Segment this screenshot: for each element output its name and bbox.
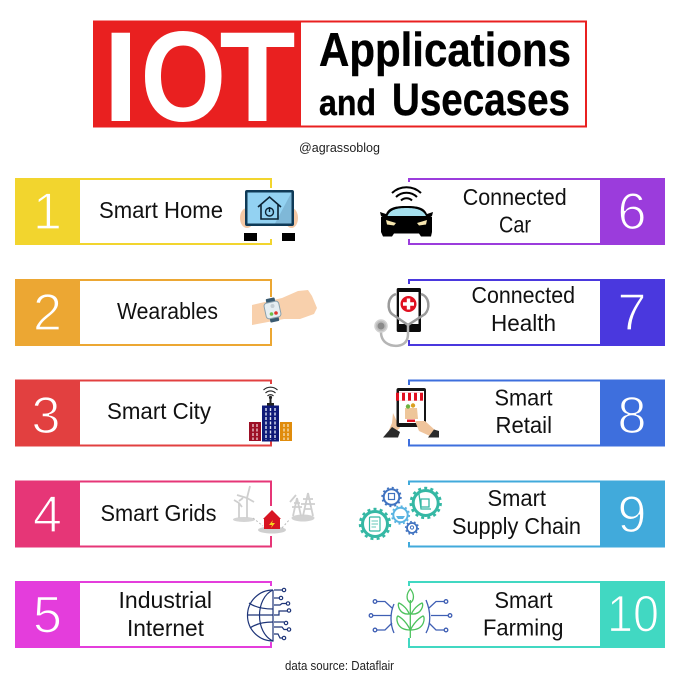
panel: 8 Smart Retail: Smart <box>494 385 553 411</box>
title: Applications <box>319 23 571 76</box>
panel: 7 Connected Health <box>375 279 665 346</box>
icon: connected car <box>380 182 433 239</box>
title: Usecases <box>392 74 570 125</box>
panel: 7 Connected Health: 7 <box>618 284 646 342</box>
panel: 2 Wearables: Wearables <box>117 298 218 324</box>
panel: 5 Industrial Internet: Industrial <box>118 587 212 613</box>
icon: smartwatch on wrist <box>252 290 317 328</box>
icon: health phone with stethoscope <box>375 284 428 346</box>
panel: 1 Smart Home: Smart Home <box>99 197 223 223</box>
panel: 3 Smart City: 3 <box>32 387 60 445</box>
icon: plant with circuits <box>369 586 452 638</box>
author handle: @agrassoblog <box>299 141 380 155</box>
panel: 7 Connected Health: Health <box>491 310 556 336</box>
panel: 7 Connected Health: Connected <box>472 282 575 308</box>
panel: 10 Smart Farming: Farming <box>483 615 564 641</box>
panel: 10 Smart Farming: 10 <box>607 586 659 644</box>
panel: 2 Wearables <box>15 279 317 346</box>
panel: 9 Smart Supply Chain: Supply Chain <box>452 513 581 539</box>
panel: 1 Smart Home: 1 <box>33 183 62 241</box>
icon: circuit globe <box>248 586 292 642</box>
panel: 5 Industrial Internet <box>15 581 292 648</box>
panel: 6 Connected Car: 6 <box>618 183 646 241</box>
panel: 8 Smart Retail <box>383 380 665 446</box>
panel: 6 Connected Car <box>380 178 665 245</box>
panel: 1 Smart Home <box>15 178 298 245</box>
title: and <box>319 82 376 123</box>
panel: 5 Industrial Internet: Internet <box>127 615 205 641</box>
icon: wind turbines, house and pylons <box>233 486 315 536</box>
panel: 9 Smart Supply Chain: 9 <box>618 486 646 544</box>
panel: 2 Wearables: 2 <box>33 284 62 342</box>
panel: 8 Smart Retail: Retail <box>496 412 552 438</box>
panel: 9 Smart Supply Chain: Smart <box>488 485 547 511</box>
panel: 4 Smart Grids: Smart Grids <box>100 500 216 526</box>
title: T <box>220 6 296 149</box>
panel: 3 Smart City <box>15 380 292 446</box>
panel: 6 Connected Car: Car <box>499 212 531 238</box>
panel: 10 Smart Farming: Smart <box>494 587 553 613</box>
icon: supply chain gears <box>360 485 441 542</box>
title: I <box>103 6 139 149</box>
title <box>93 6 586 149</box>
icon: smart city buildings <box>249 384 292 442</box>
title: O <box>140 6 226 149</box>
panel: 9 Smart Supply Chain <box>360 480 665 548</box>
panel: 5 Industrial Internet: 5 <box>33 586 62 644</box>
panel: 10 Smart Farming <box>369 581 665 648</box>
data source note: data source: Dataflair <box>285 658 395 673</box>
icon: retail tablet with hands <box>383 385 439 439</box>
icon: tablet with smart home <box>240 188 298 241</box>
panel: 4 Smart Grids <box>15 480 315 548</box>
panel: 6 Connected Car: Connected <box>463 184 567 210</box>
panel: 8 Smart Retail: 8 <box>618 387 646 445</box>
panel: 4 Smart Grids: 4 <box>33 486 62 544</box>
panel: 3 Smart City: Smart City <box>107 398 211 424</box>
